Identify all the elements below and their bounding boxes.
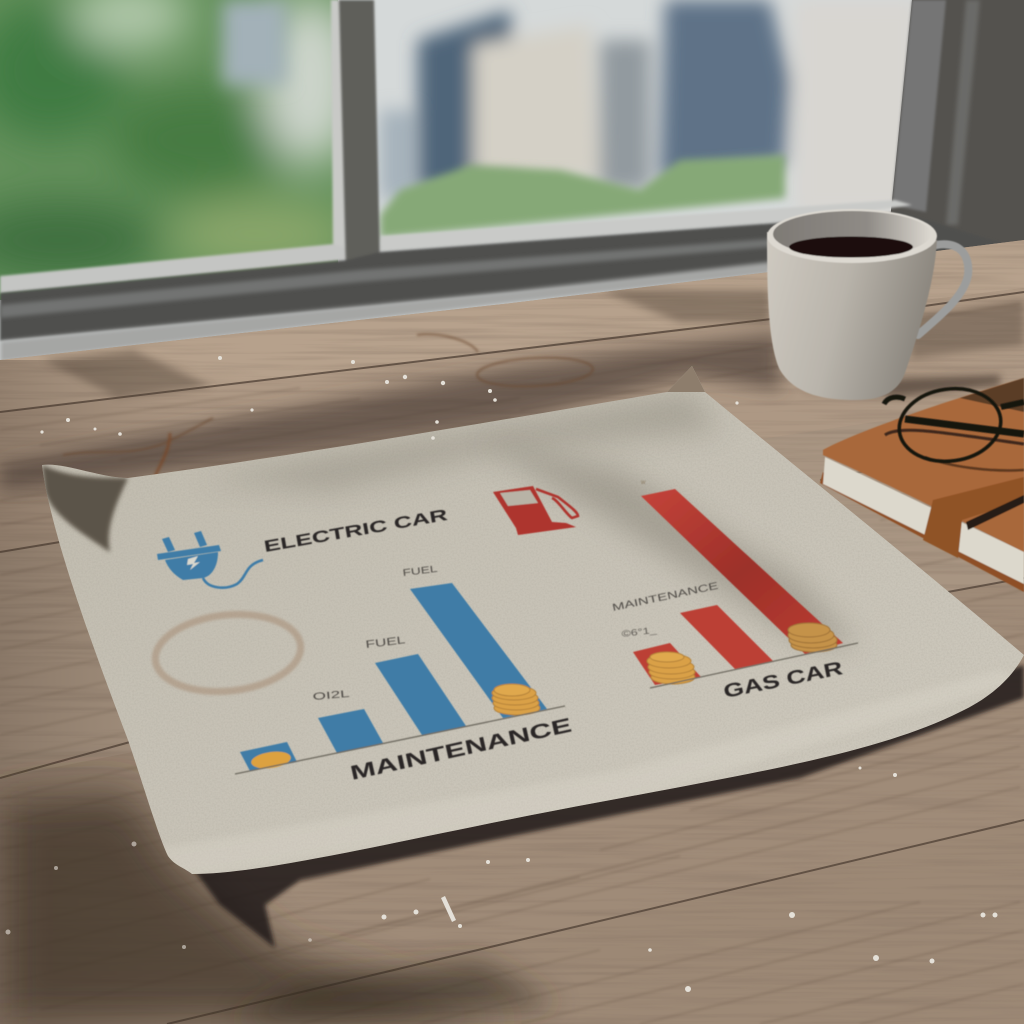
section: electric car chart — [157, 507, 574, 785]
bar 4 — [410, 583, 547, 718]
lower cover — [820, 472, 1024, 592]
dust specks — [6, 356, 998, 992]
inner white reveal left — [331, 0, 347, 255]
baseline — [650, 643, 858, 688]
sharp paper shadow — [185, 665, 1024, 948]
distant city buildings — [377, 0, 807, 204]
label: fuel: FUEL — [365, 634, 406, 651]
window sill light strip — [0, 244, 347, 294]
mug shadow — [800, 375, 1000, 396]
small mark above bar: w — [640, 480, 646, 486]
trees at left — [0, 0, 360, 300]
green bushes — [380, 155, 785, 238]
mug rim — [767, 209, 937, 263]
mug body — [767, 232, 937, 400]
pale strip — [0, 262, 770, 362]
curled corner shadow — [42, 465, 128, 552]
lens — [894, 382, 1006, 468]
coffee — [789, 236, 913, 258]
plank seams — [0, 292, 1024, 1024]
plank tones — [0, 240, 1024, 412]
temple shadow — [885, 430, 1024, 444]
label: garbled small: ©6°1_ — [621, 625, 658, 639]
tall bar — [641, 489, 843, 654]
short bar — [633, 643, 701, 685]
window view — [0, 0, 1024, 380]
curled top corner — [667, 366, 705, 392]
coin stack — [492, 684, 540, 715]
middle bar — [680, 605, 773, 669]
vertical mullion — [339, 0, 380, 270]
glasses — [884, 382, 1024, 470]
label: maintenance: MAINTENANCE — [348, 714, 574, 785]
coffee mug — [767, 209, 968, 400]
label: fuel top: FUEL — [402, 564, 438, 579]
right wall and frame — [890, 0, 1024, 260]
mug inner — [773, 211, 931, 257]
heading: gas car: GAS CAR — [722, 658, 845, 703]
coffee ring stain — [151, 608, 305, 698]
pages — [823, 457, 1024, 584]
top cover — [823, 378, 1024, 552]
wood grain streaks — [0, 304, 1024, 1024]
icon: plug — [157, 531, 263, 588]
lens shadow — [925, 457, 1024, 470]
section: gas car chart — [493, 480, 858, 703]
coin stack: tall bar — [788, 623, 837, 652]
heading: electric car: ELECTRIC CAR — [263, 507, 450, 556]
left fade — [0, 360, 148, 1024]
notebook — [820, 378, 1024, 592]
dark window frame — [0, 212, 1024, 341]
bar 3 — [375, 654, 466, 735]
table shadows — [43, 350, 213, 397]
elastic dark strip — [966, 495, 1024, 530]
bar 2 — [318, 709, 383, 753]
baseline — [235, 706, 565, 774]
wooden table — [0, 240, 1024, 1024]
stain lines on table — [63, 334, 594, 478]
coin stack: short bar — [647, 652, 695, 684]
icon: gas pump — [493, 486, 578, 535]
temple arm — [905, 419, 1024, 434]
elastic strap — [923, 477, 1024, 558]
panel: paper sheet — [0, 360, 1024, 880]
label: garbled: OI2L — [312, 689, 351, 703]
mug handle — [918, 244, 968, 335]
coin — [250, 749, 292, 771]
blurred building left — [222, 0, 287, 85]
hinge and bridge — [884, 397, 905, 404]
label: maintenance small: MAINTENANCE — [611, 581, 720, 614]
bar 1 — [240, 742, 297, 771]
